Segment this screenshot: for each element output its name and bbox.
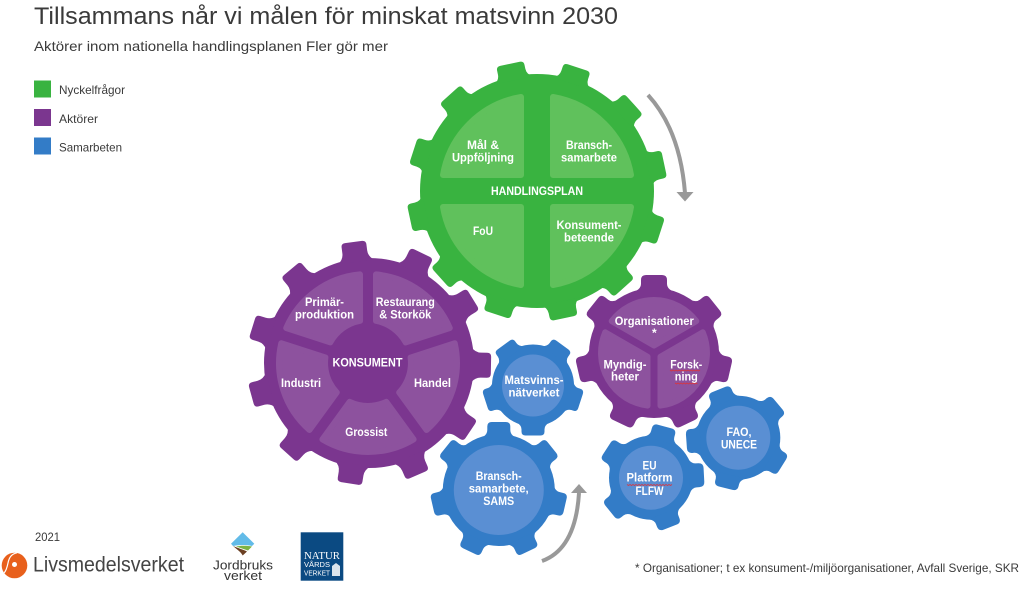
label: Bransch- xyxy=(476,469,522,483)
blue inner disc xyxy=(619,446,683,510)
green gear body with teeth xyxy=(406,60,668,322)
green gear labels: Uppföljning xyxy=(452,150,514,164)
purple gear labels: Grossist xyxy=(345,425,387,439)
logo: Livsmedelsverket xyxy=(2,553,184,578)
wordmark: Jordbruks xyxy=(213,558,273,572)
blue inner disc xyxy=(454,445,544,535)
logo: Naturvårdsverket: VERKET xyxy=(304,570,331,578)
purple gear labels: & Storkök xyxy=(379,307,432,321)
green gear labels: samarbete xyxy=(561,150,617,164)
gear: Organisationer, Myndigheter, Forskning (purple) xyxy=(574,275,734,431)
label xyxy=(626,458,672,498)
logo: Naturvårdsverket xyxy=(301,532,343,581)
gear: FAO, UNECE (blue) xyxy=(685,383,791,492)
purple gear labels: produktion xyxy=(295,307,354,321)
small purple three sectors xyxy=(587,300,721,416)
icon: diamond landscape xyxy=(231,532,254,556)
label: EU xyxy=(642,458,656,472)
wordmark: Livsmedelsverket xyxy=(33,554,184,577)
subtitle: Aktörer inom nationella handlingsplanen Fler gör mer xyxy=(34,38,388,54)
green gear labels xyxy=(452,138,622,244)
small purple gear labels xyxy=(604,314,702,384)
small purple gear labels: Forsk- xyxy=(670,357,702,371)
label: SAMS xyxy=(483,494,514,508)
blue inner disc xyxy=(706,406,770,470)
title: Tillsammans når vi målen för minskat matsvinn 2030 xyxy=(34,3,618,30)
logo: Jordbruksverket xyxy=(213,532,273,583)
green gear labels: Bransch- xyxy=(566,138,612,152)
icon: crown emblem xyxy=(332,563,340,576)
small purple gear labels: Myndig- xyxy=(604,357,646,371)
label: FLFW xyxy=(636,484,664,498)
label: Platform xyxy=(626,471,672,485)
logo: Jordbruksverket: verket xyxy=(224,569,263,583)
green gear labels: FoU xyxy=(473,224,493,238)
legend xyxy=(34,80,125,154)
green gear labels: Mål & xyxy=(467,138,499,152)
legend item: Samarbeten: Samarbeten xyxy=(59,140,122,154)
green gear labels: HANDLINGSPLAN xyxy=(491,184,583,198)
purple five sectors xyxy=(250,258,478,483)
footnote: * Organisationer; t ex konsument-/miljöorganisationer, Avfall Sverige, SKR xyxy=(635,561,1019,575)
blue gear body with teeth xyxy=(481,336,585,436)
label: UNECE xyxy=(721,437,757,451)
arrow: clockwise rotation of green gear xyxy=(648,95,694,202)
blue gear body with teeth xyxy=(685,383,791,492)
icon: orange circle xyxy=(2,553,27,578)
label xyxy=(504,373,564,400)
gear: Branschsamarbete, SAMS (blue) xyxy=(429,422,569,558)
blue gear body with teeth xyxy=(597,422,705,533)
small purple gear labels: * xyxy=(652,326,657,340)
purple gear labels: Restaurang xyxy=(376,295,435,309)
logo: Naturvårdsverket: NATUR xyxy=(304,551,340,562)
label: samarbete, xyxy=(469,482,529,496)
blue inner disc xyxy=(502,354,564,416)
legend item: Nyckelfrågor: Nyckelfrågor xyxy=(59,83,125,97)
arrow: rotation of blue gears xyxy=(542,484,587,561)
blue gear body with teeth xyxy=(429,422,569,558)
label: FAO, xyxy=(726,425,752,439)
green gear labels: Konsument- xyxy=(556,218,622,232)
gear: HANDLINGSPLAN (green) xyxy=(406,60,668,322)
label: Matsvinns- xyxy=(504,373,564,387)
gear: KONSUMENT (purple) xyxy=(247,240,491,486)
purple gear body with teeth xyxy=(247,240,491,486)
purple gear labels: Primär- xyxy=(305,295,344,309)
label: nätverket xyxy=(508,386,560,400)
year: 2021 xyxy=(35,530,60,544)
small purple gear labels: ning xyxy=(675,370,698,384)
purple gear labels: KONSUMENT xyxy=(332,356,403,370)
legend item: Aktörer: Aktörer xyxy=(59,112,98,126)
gear: EU Platform FLFW (blue) xyxy=(597,422,705,533)
label xyxy=(469,469,529,508)
green gear labels: beteende xyxy=(564,230,614,244)
logo: Naturvårdsverket: VÅRDS xyxy=(304,560,330,569)
label xyxy=(721,425,757,451)
small purple gear body with teeth xyxy=(574,275,734,431)
green quadrants xyxy=(443,97,631,285)
purple gear labels xyxy=(281,295,451,439)
purple gear labels: Handel xyxy=(414,376,451,390)
purple gear labels: Industri xyxy=(281,376,321,390)
small purple gear labels: Organisationer xyxy=(615,314,694,328)
gear: Matsvinnsnätverket (blue) xyxy=(481,336,585,436)
small purple gear labels: heter xyxy=(611,370,639,384)
